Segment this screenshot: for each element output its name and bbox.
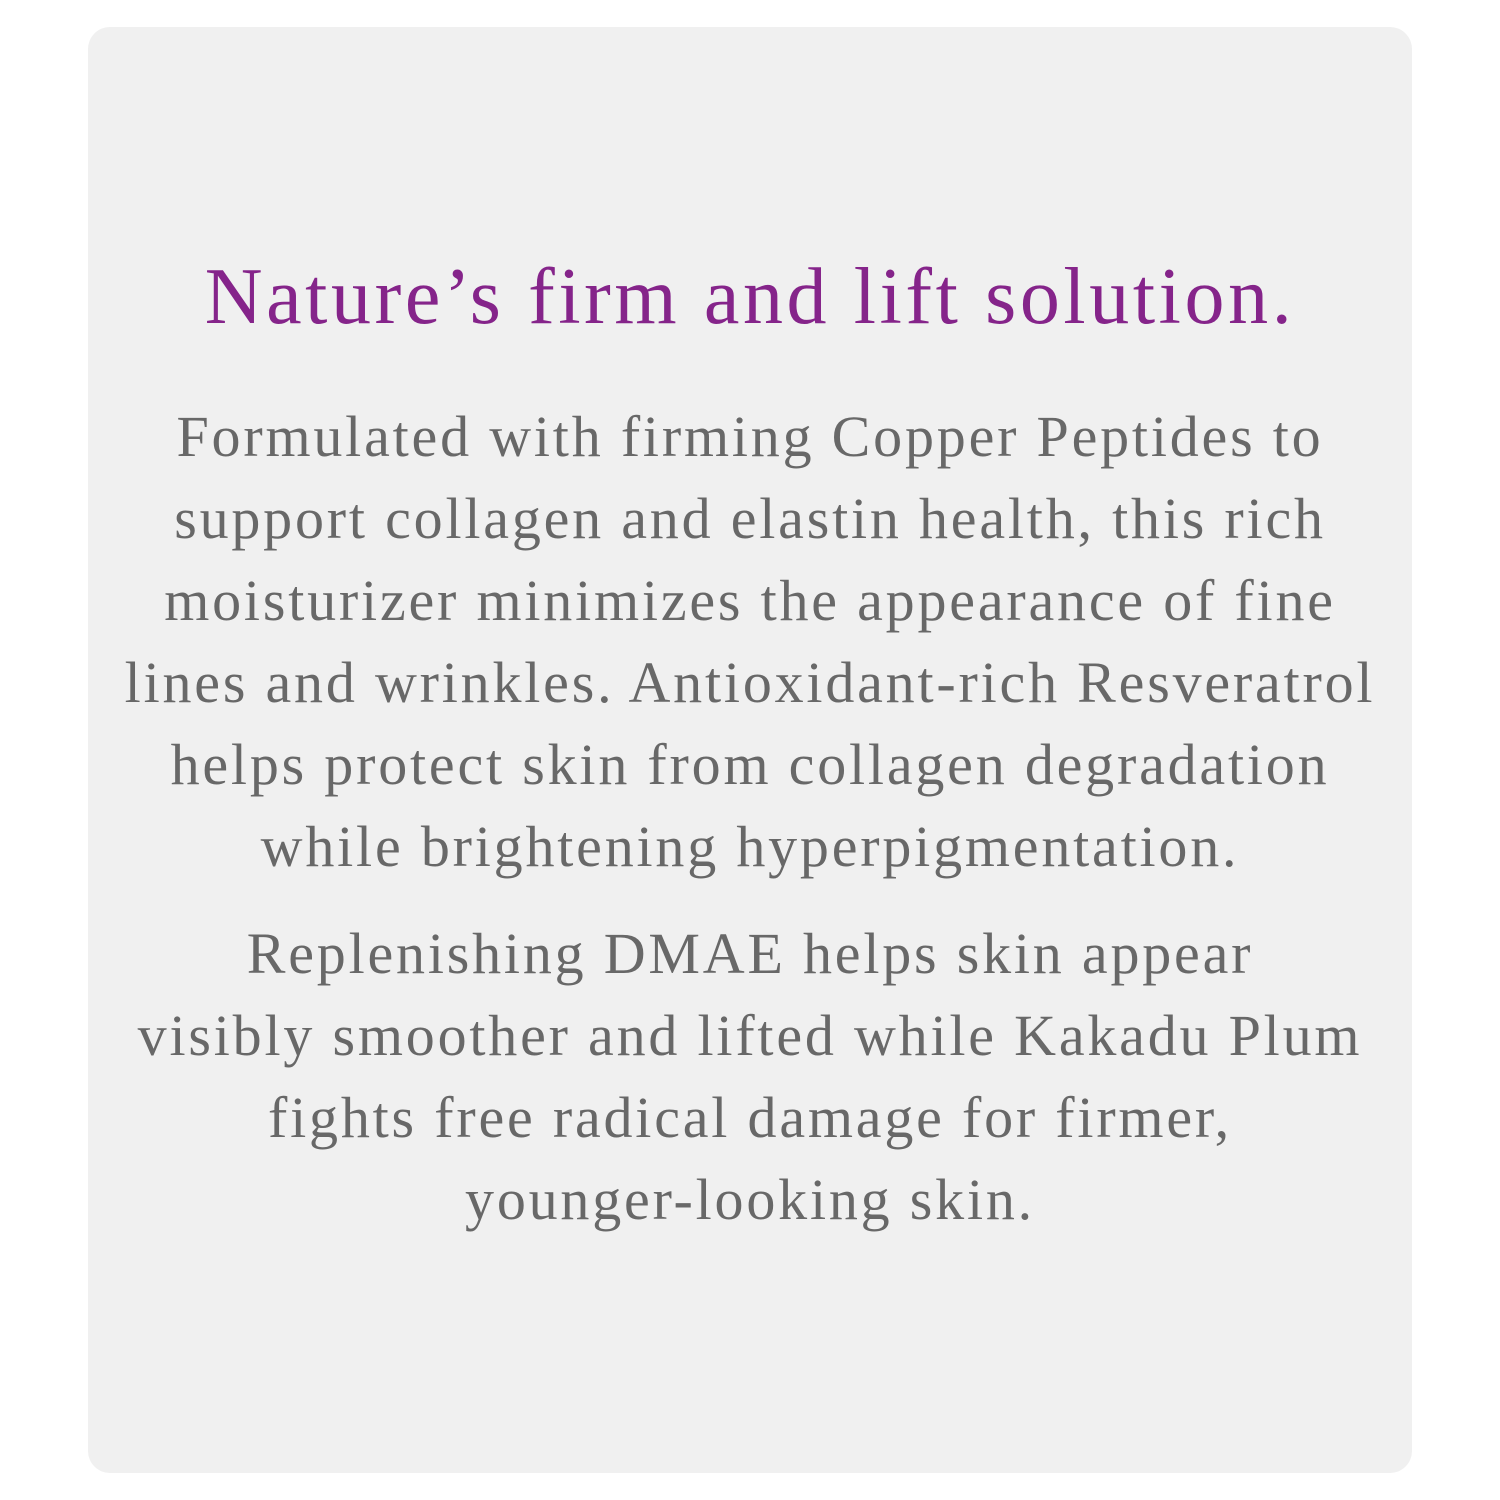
title: Nature’s firm and lift solution. (205, 253, 1295, 341)
text block: paragraph 1: moisturizer minimizes the appearance of fine (164, 568, 1336, 633)
text block: paragraph 1: while brightening hyperpigmentation. (261, 814, 1239, 879)
text block: paragraph 2 (138, 921, 1362, 1232)
text block: paragraph 2: younger-looking skin. (465, 1167, 1035, 1232)
text block: paragraph 1: lines and wrinkles. Antioxidant-rich Resveratrol (125, 650, 1375, 715)
text block: paragraph 1: support collagen and elastin health, this rich (174, 486, 1326, 551)
text block: paragraph 1: Formulated with firming Copper Peptides to (176, 404, 1324, 469)
text block: paragraph 1: helps protect skin from collagen degradation (171, 732, 1329, 797)
text block: paragraph 2: visibly smoother and lifted while Kakadu Plum (138, 1003, 1362, 1068)
text block: paragraph 2: Replenishing DMAE helps skin appear (247, 921, 1253, 986)
text block: paragraph 1 (125, 404, 1375, 879)
text block: paragraph 2: fights free radical damage for firmer, (268, 1085, 1232, 1150)
